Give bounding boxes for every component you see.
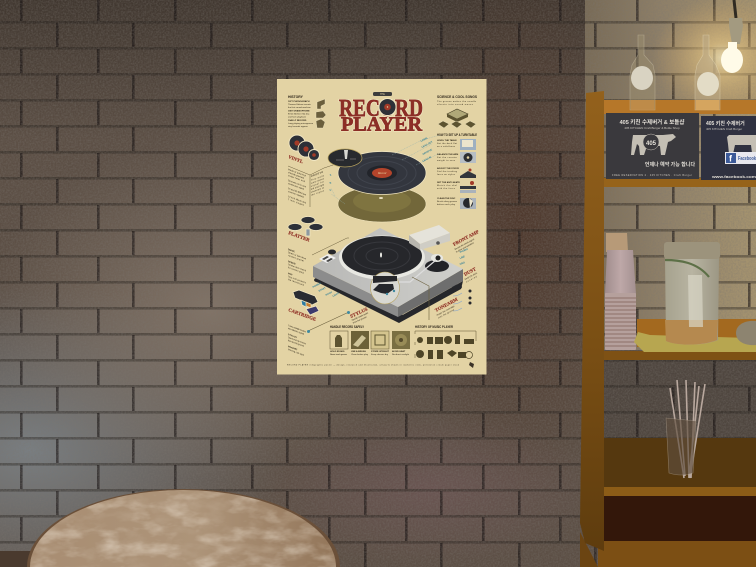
marble table xyxy=(0,489,340,567)
handle panel 3 xyxy=(371,331,390,356)
amplifier box xyxy=(409,225,450,250)
needle magnifier bubble xyxy=(328,149,362,167)
vinyl text left: chloride pressed xyxy=(288,172,305,180)
bottom shelf xyxy=(598,541,756,567)
cartridge magnifier xyxy=(370,272,400,304)
amp labels: LINE xyxy=(459,255,466,260)
dotted leader lines xyxy=(331,135,440,204)
vinyl text left: continuous spiral xyxy=(288,182,304,191)
platter text xyxy=(288,249,307,288)
history text: 1887 GRAMOPHONE xyxy=(288,110,310,112)
vinyl text left: Made of polyvinyl xyxy=(288,169,306,178)
stylus label: STYLUS xyxy=(350,307,369,320)
amp text: Boosts the weak signal xyxy=(454,238,475,251)
amp labels: PHONO xyxy=(459,248,469,254)
setup step 5: before each play xyxy=(437,203,456,206)
timeline icons xyxy=(416,335,474,359)
history text: Thomas Edison invents xyxy=(288,103,312,106)
blue labels on side: POWER xyxy=(312,282,322,289)
bulb glass xyxy=(721,47,743,73)
title word PLAYER: PLAYER xyxy=(341,114,423,136)
setup step 2 xyxy=(437,152,476,163)
cup top xyxy=(606,233,628,252)
tonearm text: Holds the cartridge xyxy=(436,304,456,317)
history text: and horn playback xyxy=(288,116,307,118)
vertical post xyxy=(580,91,604,551)
dust text xyxy=(464,271,480,284)
blue labels near record: GROOVE xyxy=(422,148,433,156)
icons: phonographs xyxy=(316,99,326,128)
right sign xyxy=(701,116,756,180)
history section xyxy=(288,95,326,128)
handle panel 4: AVOID HEAT xyxy=(392,350,406,353)
setup step 3: ADJUST THE FORCE xyxy=(437,167,460,170)
exploded record diagram xyxy=(328,135,440,222)
bulb cord xyxy=(734,0,736,18)
platter text: Slip mat protects xyxy=(288,275,307,285)
cartridge text: into electric signal xyxy=(288,327,304,336)
water pitcher xyxy=(664,242,720,345)
amp labels: GND xyxy=(459,261,466,266)
setup step 2: Set the counter xyxy=(437,156,457,159)
deck sides xyxy=(313,266,398,317)
handle records safely xyxy=(330,325,410,356)
science section xyxy=(437,95,478,128)
shelf back lower dark xyxy=(604,438,756,488)
turntable illustration xyxy=(312,225,463,323)
vinyl text left: common speeds xyxy=(288,191,305,199)
marble mottling xyxy=(27,489,340,567)
title word RECORD: RECORD xyxy=(339,96,423,122)
deck right side xyxy=(398,269,463,317)
blue labels near record: LABEL xyxy=(420,136,429,143)
straw glass xyxy=(666,380,705,478)
vinyl text right: channels to xyxy=(311,186,325,194)
setup step 4: with the force xyxy=(437,187,456,190)
setup step 1 xyxy=(437,139,476,150)
setup step 2: weight to zero xyxy=(437,159,456,162)
icon: cow: 405 xyxy=(646,141,657,147)
science text: The groove makes the needle xyxy=(437,100,477,103)
blue labels near record: C xyxy=(329,188,332,192)
blue labels on side: LIGHT xyxy=(332,292,340,298)
sign title: 405 키친 수제버거 & 보틀샵 xyxy=(620,118,684,126)
vinyl text right: carry stereo xyxy=(311,177,325,185)
water tint bottom xyxy=(665,320,718,345)
sign board xyxy=(606,113,699,179)
left sign xyxy=(606,113,699,179)
icons: three small players xyxy=(438,121,476,128)
history of music player xyxy=(415,325,476,359)
cartridge text: Moving coil type xyxy=(288,348,305,357)
vinyl text right: GROOVE xyxy=(311,171,323,178)
dust text: Keep the deck xyxy=(464,271,479,281)
vinyl text left: 12 inch album and xyxy=(288,196,307,205)
handle panel 4: No direct sunlight xyxy=(392,353,409,356)
bottle right xyxy=(695,35,720,110)
small tag above title: THE xyxy=(380,93,385,96)
base and feet xyxy=(314,276,463,323)
handle panel 4 xyxy=(392,331,410,356)
setup heading: HOW TO SET UP A TURNTABLE xyxy=(437,133,478,137)
middle shelf plank xyxy=(604,351,756,360)
bottle left xyxy=(630,35,655,110)
straws xyxy=(670,380,705,478)
icon: small turntable xyxy=(447,109,468,122)
tonearm xyxy=(380,254,449,282)
dust text: covered xyxy=(465,275,478,284)
vinyl heading: VINYL xyxy=(287,155,304,165)
vinyl record: Record xyxy=(378,171,387,175)
handle panel 3: STORE UPRIGHT xyxy=(371,351,390,353)
dark floor corner xyxy=(0,551,34,567)
tonearm text: over the groove xyxy=(437,308,455,320)
record labels xyxy=(294,140,316,157)
timeline frames xyxy=(415,331,476,358)
logo mark xyxy=(469,362,474,368)
poster xyxy=(277,79,486,374)
amp heading: FRONT AMP xyxy=(453,230,480,248)
vinyl text right xyxy=(311,171,325,197)
handle panel 1: Never touch groove xyxy=(330,353,348,356)
footer xyxy=(287,362,474,368)
blue labels near record: LEAD IN xyxy=(422,156,432,163)
setup step 2: BALANCE THE ARM xyxy=(437,153,458,156)
blue labels on side: PITCH xyxy=(325,291,333,297)
vinyl text right: left and right xyxy=(311,183,324,191)
vinyl text left: Grooves run in one xyxy=(288,180,307,189)
middle shelf backing xyxy=(637,319,756,347)
platter text: the record face xyxy=(288,278,305,287)
tonearm leader line xyxy=(412,277,429,320)
deck top xyxy=(313,228,463,307)
platter text: rotates platter xyxy=(288,254,304,263)
amp labels xyxy=(459,248,469,266)
dust cover callout xyxy=(464,267,480,284)
history text: 1877 PHONOGRAPH xyxy=(288,100,310,103)
top shelf plank xyxy=(604,100,756,114)
platter text: for correct pitch xyxy=(288,266,305,275)
platter connector xyxy=(312,238,349,255)
setup step 1: on a solid base xyxy=(437,146,456,148)
cartridge text: STYLUS xyxy=(288,334,297,339)
setup step 1: Set the deck flat xyxy=(437,142,457,145)
bulb glow xyxy=(652,0,756,120)
handle panel 1 xyxy=(330,331,348,356)
table rim xyxy=(27,489,340,567)
vinyl text left: 7 inch singles xyxy=(288,199,305,207)
platter heading: PLATTER xyxy=(287,231,310,244)
connector from vinyl panel to record xyxy=(288,162,342,207)
setup step 1: LEVEL THE TABLE xyxy=(437,139,457,142)
setup step 4: SET THE ANTI-SKATE xyxy=(437,181,460,184)
record used as the letter O xyxy=(379,98,396,116)
setup step 4: Match the dial xyxy=(437,184,458,187)
history text: Long playing microgroove xyxy=(288,122,314,125)
paper cups xyxy=(605,233,636,350)
blue labels near record: LEAD OUT xyxy=(421,140,434,149)
history text: the first sound machine xyxy=(288,106,311,109)
glass xyxy=(666,418,696,475)
music player heading: HISTORY OF MUSIC PLAYER xyxy=(415,325,453,329)
cartridge heading: CARTRIDGE xyxy=(287,308,316,323)
sign subtitle: 405 KITCHEN Craft Burger xyxy=(706,127,742,131)
cable connectors xyxy=(453,290,472,311)
tonearm text xyxy=(436,304,457,320)
handle panel 1: HOLD EDGES xyxy=(330,351,345,353)
vinyl text left: 33 and 45 RPM are xyxy=(288,188,307,197)
sign subtitle: 405 KITCHEN Craft Burger & Bottle Shop xyxy=(624,126,680,130)
amp text: to drive your speakers xyxy=(455,241,475,254)
vinyl text right: signal for xyxy=(311,181,324,188)
reservation text: 언제나 예약 가능 합니다 xyxy=(645,161,695,168)
record trio xyxy=(289,135,320,160)
cartridge connector xyxy=(307,311,350,333)
cartridge section xyxy=(287,290,371,358)
setup step 3: force on stylus xyxy=(437,173,456,176)
blue labels near record: B xyxy=(329,181,332,185)
handle heading: HANDLE RECORD SAFELY xyxy=(330,325,365,329)
dust heading: DUST xyxy=(464,267,478,278)
olive shadow disc xyxy=(338,186,426,222)
cartridge text: the record groove xyxy=(288,339,305,348)
platter text: Direct or belt drive xyxy=(288,251,307,261)
stacked cup rims xyxy=(605,293,636,350)
cartridge text: Turns needle motion xyxy=(288,324,307,334)
shelf back dark cavity xyxy=(604,495,756,542)
pitcher lid xyxy=(664,242,720,259)
setup step 3: Dial the tracking xyxy=(437,170,458,173)
science heading: SCIENCE & COOL SONGS xyxy=(437,95,478,99)
sign URL: www.facebook.com xyxy=(711,175,756,179)
science text: vibrate into sound waves xyxy=(437,103,474,106)
table top xyxy=(30,490,336,567)
blue labels on side xyxy=(312,282,340,298)
setup step 5 xyxy=(437,197,476,209)
left platter parts xyxy=(287,216,349,288)
poster sheet xyxy=(277,79,486,374)
vinyl text left: under heat and xyxy=(288,174,306,183)
herb sprig xyxy=(665,260,709,277)
top sign bar xyxy=(604,178,756,187)
amp text xyxy=(454,238,477,254)
inner tube xyxy=(688,275,703,327)
sign title: 405 키친 수제버거 xyxy=(706,120,745,127)
vinyl text panel xyxy=(287,155,342,208)
Facebook badge: f xyxy=(729,154,733,164)
blue labels near record xyxy=(329,136,434,192)
cartridge text: MAGNET xyxy=(288,345,298,352)
handle panel 2 xyxy=(351,331,369,356)
vinyl text left xyxy=(288,169,307,208)
science text xyxy=(437,100,477,106)
cartridge illustration xyxy=(293,290,319,315)
icon: cow xyxy=(727,135,756,154)
cartridge text xyxy=(288,324,307,358)
tonearm heading: TONEARM xyxy=(435,297,459,314)
title xyxy=(339,92,423,136)
platter and record xyxy=(339,236,425,280)
left records group xyxy=(289,135,320,160)
platter parts icons xyxy=(288,216,323,236)
setup step 3 xyxy=(437,167,476,178)
platter text: MAT xyxy=(288,272,293,277)
lower shelf plank xyxy=(604,487,756,496)
blue labels near record: A xyxy=(329,173,332,177)
bowl at right edge xyxy=(736,321,756,345)
platter text: Strobe dots check xyxy=(288,263,307,273)
light bulb xyxy=(721,0,743,73)
towel xyxy=(634,332,756,352)
tonearm callout xyxy=(412,277,459,320)
Facebook badge xyxy=(725,152,756,164)
amp callout xyxy=(453,230,480,266)
handle panel 3: Keep sleeves dry xyxy=(371,353,389,356)
blue labels on side: START xyxy=(318,286,327,293)
platter text: SPEED xyxy=(288,261,296,266)
history text xyxy=(288,100,314,128)
stylus text xyxy=(351,311,371,325)
setup step 5: Brush along groove xyxy=(437,200,458,203)
wooden shelf unit xyxy=(580,91,756,567)
footer text: RECORD PLAYER infographic poster — design, research and illustration, all parts shown in isometric view, printed on cream paper stock xyxy=(287,364,459,366)
setup step 4 xyxy=(437,181,476,193)
setup section xyxy=(437,133,478,209)
vinyl text right: Tiny walls xyxy=(311,175,325,182)
sign small text: FREE RESERVATION 2 · 405 KITCHEN · Craft Burger xyxy=(612,174,692,177)
stylus text: from the groove xyxy=(352,315,368,325)
cup body xyxy=(605,250,636,294)
sign board xyxy=(701,116,756,180)
handle panel 2: Clean before play xyxy=(351,353,369,356)
history text: 1948 LP RECORD xyxy=(288,119,307,122)
history text: Emile Berliner flat disc xyxy=(288,112,311,116)
cartridge text: Diamond tip tracks xyxy=(288,336,307,346)
setup step 5: CLEAN THE DISC xyxy=(437,197,456,200)
stylus text: Needle reads audio xyxy=(351,311,369,322)
pitcher body xyxy=(665,258,719,345)
history text: vinyl records appear xyxy=(288,125,308,128)
vinyl text right: the stylus xyxy=(311,189,325,197)
post foot xyxy=(580,532,598,567)
handle panel 2: USE A BRUSH xyxy=(351,350,366,353)
controls xyxy=(319,250,336,263)
history heading: HISTORY xyxy=(288,95,304,99)
bottles xyxy=(630,35,720,110)
bulb socket xyxy=(729,18,743,44)
platter text: DRIVE xyxy=(288,249,295,254)
